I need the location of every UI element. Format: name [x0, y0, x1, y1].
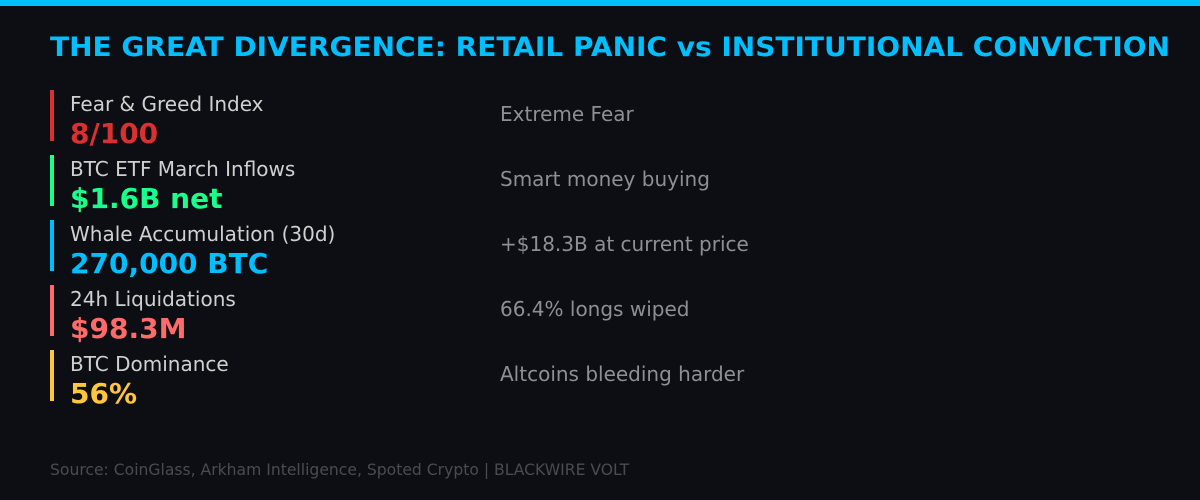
row: liquidations: [50, 285, 689, 345]
row: whale accumulation: 270,000 BTC: [70, 247, 268, 280]
row: ETF inflows: [50, 155, 710, 215]
row: dominance: BTC Dominance: [70, 352, 229, 376]
row: whale accumulation: Whale Accumulation (30d): [70, 222, 335, 246]
row: liquidations: $98.3M: [70, 312, 186, 345]
row: ETF inflows: $1.6B net: [70, 182, 222, 215]
row: dominance: [50, 350, 745, 410]
row: ETF inflows: Smart money buying: [500, 167, 710, 191]
row: fear & greed: 8/100: [70, 117, 158, 150]
row: liquidations: 66.4% longs wiped: [500, 297, 689, 321]
row: fear & greed: [50, 90, 635, 150]
row: liquidations: 24h Liquidations: [70, 287, 236, 311]
title: THE GREAT DIVERGENCE: RETAIL PANIC vs INSTITUTIONAL CONVICTION: [50, 32, 1170, 63]
row: whale accumulation: [50, 220, 749, 280]
top accent bar: [0, 0, 1200, 6]
row: dominance: 56%: [70, 377, 137, 410]
row: fear & greed: Fear & Greed Index: [70, 92, 264, 116]
source footer: Source: CoinGlass, Arkham Intelligence, Spoted Crypto | BLACKWIRE VOLT: [50, 461, 630, 479]
row: whale accumulation: +$18.3B at current price: [500, 232, 749, 256]
row: dominance: Altcoins bleeding harder: [500, 362, 745, 386]
row: ETF inflows: BTC ETF March Inflows: [70, 157, 295, 181]
row: fear & greed: Extreme Fear: [500, 102, 635, 126]
